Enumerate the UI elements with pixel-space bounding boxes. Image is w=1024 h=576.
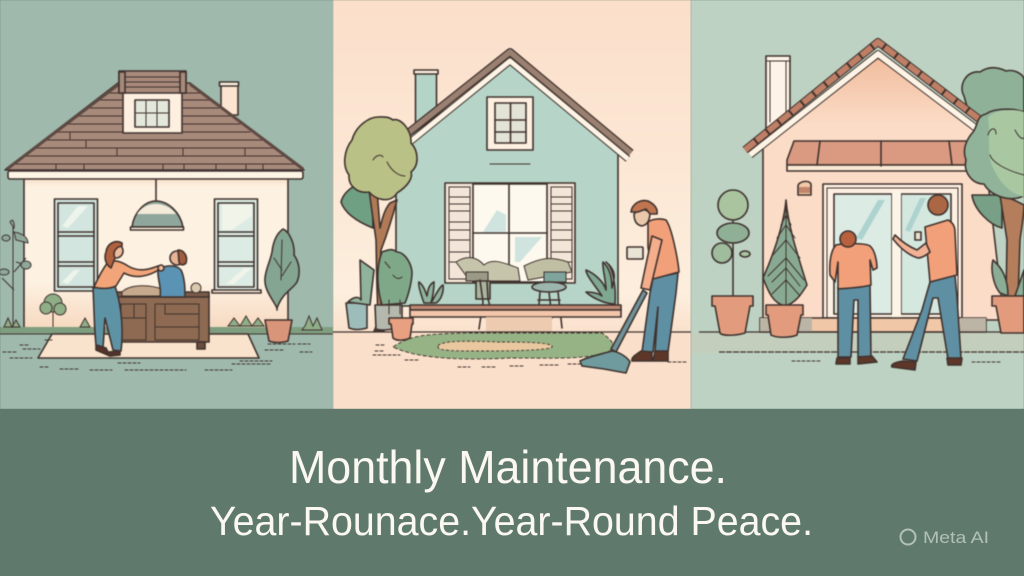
panel: monthly interior and lawn care scene <box>333 0 691 409</box>
work table <box>115 283 209 349</box>
topiary in pot <box>712 190 753 335</box>
outdoor table and stool <box>476 280 566 329</box>
gable roof <box>745 42 979 155</box>
left window <box>54 199 98 291</box>
headline line 1: Monthly Maintenance. <box>289 441 727 493</box>
attic window <box>487 97 533 150</box>
main window with shutters <box>445 183 575 283</box>
fern right <box>586 262 615 304</box>
house wall <box>24 178 288 328</box>
person seated: blue top <box>158 250 187 297</box>
person crouching at door <box>830 231 877 364</box>
awning <box>787 141 967 171</box>
watermark <box>900 528 989 547</box>
person standing: orange top and jeans <box>93 242 164 356</box>
ground line <box>333 331 691 333</box>
peach house body <box>763 58 1004 320</box>
right window <box>214 199 258 291</box>
man with vacuum <box>627 201 679 361</box>
ground line <box>699 331 1024 333</box>
entry step <box>760 318 986 332</box>
conifer in pot <box>763 200 807 337</box>
headline line 2: Year-Rounace.Year-Round Peace. <box>210 498 813 544</box>
sill <box>212 290 261 293</box>
shrubs and pots by tree <box>346 250 413 340</box>
green house body <box>396 62 618 306</box>
vacuum cleaner <box>580 290 647 373</box>
back tree <box>962 68 1024 165</box>
lawn patch <box>393 333 614 359</box>
dormer <box>119 71 186 133</box>
grass marks <box>3 340 312 370</box>
ground strip <box>0 327 333 334</box>
deck steps <box>410 305 621 332</box>
fascia <box>8 171 303 179</box>
pendant lamp <box>130 180 184 230</box>
tiled roof <box>5 83 304 172</box>
front tree in pot <box>964 109 1024 333</box>
shrubs <box>4 294 322 330</box>
watermark: Meta AI <box>923 528 989 547</box>
wall lamp <box>798 181 811 195</box>
gable roof trim <box>408 52 631 159</box>
chimney <box>766 56 790 128</box>
door frame <box>823 184 962 318</box>
patio mat <box>38 334 259 358</box>
potted tree <box>265 229 299 342</box>
chimney <box>414 70 438 127</box>
slogan band <box>0 409 1024 576</box>
window box plants <box>456 258 572 282</box>
fern left <box>419 282 443 303</box>
dormer window <box>135 100 169 127</box>
panel: monthly exterior scene <box>0 0 333 409</box>
right shutter <box>551 187 572 279</box>
left shutter <box>449 187 470 279</box>
chimney <box>220 82 238 115</box>
bare plant left <box>0 220 31 327</box>
person standing at door <box>892 195 962 370</box>
panel: monthly door inspection scene <box>691 0 1024 409</box>
tree <box>341 117 417 331</box>
